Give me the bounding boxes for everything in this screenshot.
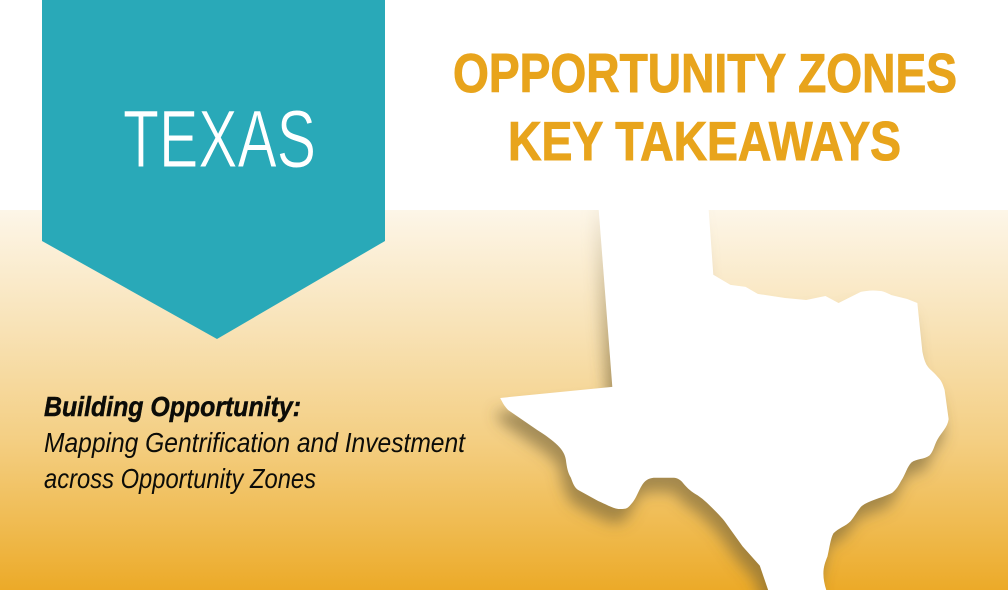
- report subtitle: [44, 391, 466, 494]
- subtitle line 3: across Opportunity Zones: [44, 463, 316, 494]
- state silhouette: [500, 190, 949, 590]
- title line 2: KEY TAKEAWAYS: [508, 110, 901, 172]
- map shadow: [495, 204, 944, 590]
- title: [453, 42, 957, 172]
- banner shape: [42, 0, 385, 339]
- subtitle bold line: Building Opportunity:: [44, 391, 301, 422]
- subtitle line 2: Mapping Gentrification and Investment: [44, 427, 466, 458]
- teal banner with state name: [42, 0, 385, 339]
- background gradient band: [0, 210, 1008, 590]
- map of Texas: [495, 190, 949, 590]
- state name: TEXAS: [123, 94, 316, 185]
